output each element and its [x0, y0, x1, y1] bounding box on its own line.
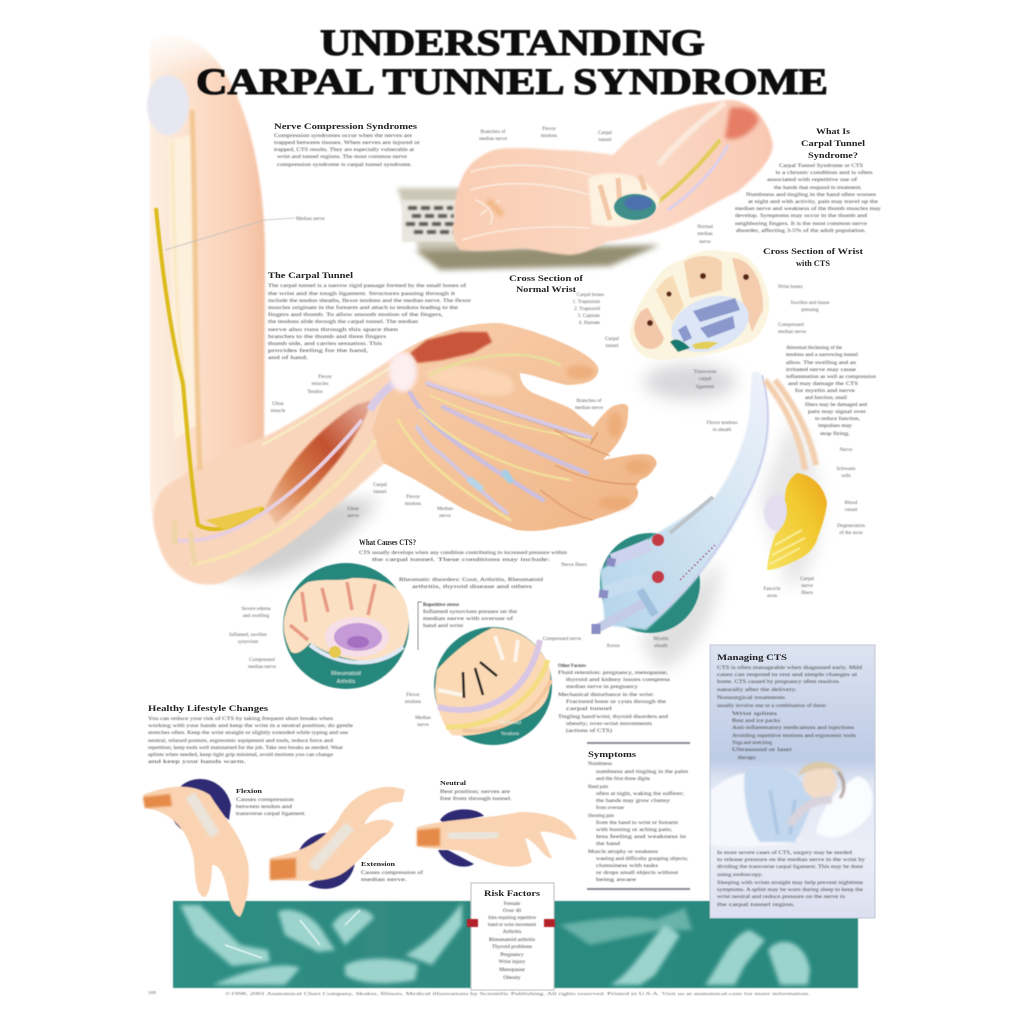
- anatomical labels: median: [697, 231, 713, 237]
- text: nerve compression syndromes: trapped between tissues. When nerves are injured or: [274, 140, 420, 146]
- text: cross section of normal wrist: Normal Wrist: [516, 285, 576, 294]
- text: flexion label: between tendon and: [236, 804, 292, 810]
- panel: managing CTS: [710, 645, 875, 918]
- anatomical labels: Fascicle: [764, 586, 781, 592]
- anatomical labels: in sheath: [713, 427, 732, 433]
- lobe C: [684, 256, 722, 298]
- anatomical labels: cells: [841, 473, 851, 479]
- text: healthy lifestyle changes: stretches often. Keep the wrist straight or slightly extended while typing and use: [148, 729, 349, 736]
- lobe B: [656, 276, 684, 322]
- anatomical labels: tendons: [541, 133, 557, 139]
- pale hands in band: [180, 903, 810, 985]
- text: CTS pathology description: irritated nerve may cause: [786, 367, 857, 373]
- text: what causes CTS: Rheumatic disorders: Gout, Arthritis, Rheumatoid: [399, 577, 543, 583]
- text: the carpal tunnel: The Carpal Tunnel: [268, 271, 354, 280]
- panel: managing CTS: Yoga and stretching: [732, 740, 772, 746]
- anatomical labels: Wrist bones: [778, 284, 803, 290]
- text: symptoms: from overuse: [596, 804, 624, 811]
- panel: risk factors: hand or wrist movement: [488, 922, 536, 928]
- panel: managing CTS: naturally after the delivery.: [717, 686, 798, 693]
- anatomical labels: Flexor: [406, 494, 420, 500]
- text: symptoms: Muscle atrophy or weakness: [588, 849, 658, 855]
- anatomical labels: Carpal: [800, 576, 814, 582]
- text: other factors list: Other Factors: [558, 663, 587, 669]
- panel: risk factors: Obesity: [503, 975, 521, 981]
- anatomical labels: nerve: [801, 583, 813, 589]
- anatomical labels: Blood: [845, 500, 858, 506]
- thumb muscle: [410, 332, 492, 363]
- anatomical labels: tendons: [405, 501, 421, 507]
- anatomical labels: Ulnar: [347, 506, 359, 512]
- text: what is carpal tunnel syndrome: develop. Symptoms may occur in the thumb and: [735, 213, 867, 219]
- arm muscle and nerve: [725, 107, 758, 139]
- text: nerve compression syndromes: compression syndrome is carpal tunnel syndrome.: [277, 162, 413, 168]
- text: what causes CTS: What Causes CTS?: [359, 538, 416, 547]
- anatomical labels: median nerve: [248, 664, 277, 670]
- anatomical labels: Schwann: [836, 466, 856, 472]
- text: CTS pathology description: for myelin and nerve: [795, 387, 856, 394]
- text: nerve compression syndromes: Nerve Compression Syndromes: [274, 122, 417, 131]
- lobe D: [732, 258, 763, 332]
- panel: managing CTS: using endoscopy.: [717, 872, 764, 878]
- anatomical labels: Severe edema: [242, 606, 271, 612]
- anatomical labels: Branches of: [577, 397, 602, 404]
- text: extension label: [361, 861, 423, 883]
- text: symptoms: numbness and tingling in the palm: [596, 769, 689, 775]
- text: symptoms: clumsiness with tasks: [596, 863, 658, 869]
- text: what is carpal tunnel syndrome: Carpal Tunnel Syndrome or CTS: [779, 163, 863, 169]
- anatomical labels: Flexor tendons: [707, 420, 737, 426]
- forearm tendons: [175, 365, 400, 565]
- anatomical labels: median nerve: [479, 136, 508, 142]
- text: what is carpal tunnel syndrome: with CTS: [796, 259, 831, 268]
- shoulder bone and upper arm strips: [147, 75, 200, 470]
- text: other factors list: (actions of CTS): [566, 727, 612, 734]
- text: healthy lifestyle changes: splints when needed, keep tight grip minimal, avoid motions you can change: [148, 752, 334, 758]
- circle: thickened tendons: [434, 627, 552, 745]
- circle: rheumatoid arthritis: Arthritis: [337, 679, 356, 685]
- circle: rheumatoid arthritis: [283, 563, 409, 689]
- text: healthy lifestyle changes: working with your hands and keep the wrist in a neutral position; do gentle: [148, 723, 354, 729]
- panel: managing CTS: Sleeping with wrists straight may help prevent nighttime: [717, 880, 864, 886]
- text: the carpal tunnel: branches to the thumb and three fingers: [268, 333, 386, 340]
- finger separators: [540, 430, 636, 520]
- anatomical labels: Flexor: [406, 692, 420, 698]
- panel: risk factors: Menopause: [499, 967, 525, 973]
- anatomical labels: Median: [415, 715, 431, 721]
- text: CTS pathology description: and may damage the CTS: [788, 381, 858, 387]
- text: what is carpal tunnel syndrome: Numbness and tingling in the hand often worsen: [746, 191, 876, 198]
- text: the carpal tunnel: provides feeling for the hand,: [268, 347, 369, 354]
- anatomical labels: Compressed: [249, 657, 275, 663]
- anatomical labels: Transverse: [694, 369, 717, 375]
- text: CTS pathology description: and function; small: [805, 394, 847, 401]
- hand and forearm: [453, 100, 773, 255]
- soft shadows: [760, 420, 820, 590]
- text: symptoms: Symptoms: [588, 750, 636, 759]
- red tabs: [467, 919, 478, 927]
- text: neutral label: Best position; nerves are: [440, 789, 511, 795]
- anatomical labels: Swollen and tissue: [791, 300, 830, 306]
- forearm: [153, 347, 425, 585]
- text: flexion label: Flexion: [236, 788, 262, 795]
- elbow tendon cluster: [205, 506, 262, 530]
- anatomical labels: muscle: [271, 408, 286, 414]
- text: nerve compression syndromes: Compression syndromes occur when the nerves are: [274, 133, 413, 139]
- anatomical labels: Carpal bones: [577, 292, 604, 298]
- text: cross section of normal wrist: Cross Section of: [509, 274, 583, 283]
- panel: managing CTS: Ultrasound or laser: [732, 747, 792, 753]
- text: symptoms: Shooting pain: [588, 813, 614, 819]
- text: the carpal tunnel: the tendons slide through the carpal tunnel. The median: [268, 319, 418, 325]
- text: nerve compression syndromes: [274, 122, 420, 168]
- anatomical labels: carpal: [699, 376, 712, 382]
- text: the carpal tunnel: the wrist and the tough ligament. Structures passing through it: [268, 291, 456, 297]
- anatomical labels: Flexor: [542, 126, 556, 132]
- forearm muscle: [265, 400, 372, 524]
- text: neutral label: [440, 780, 513, 802]
- text: other factors list: thyroid and kidney issues compress: [566, 677, 670, 683]
- yellow nerve bundle: [767, 473, 827, 570]
- thenar pad: [425, 366, 514, 396]
- text: cross section of normal wrist: [509, 274, 583, 294]
- cut nerve cylinders: [596, 497, 713, 634]
- anatomical labels: tunnel: [599, 137, 612, 143]
- anatomical labels: 2. Trapezoid: [574, 306, 600, 312]
- panel: managing CTS: cases can respond to rest and simple changes at: [717, 672, 858, 678]
- text: the carpal tunnel: fingers and thumb. To allow smooth motion of the fingers,: [268, 311, 444, 318]
- text: symptoms: and the first three digits: [596, 775, 650, 782]
- anatomical labels: and swelling: [243, 613, 270, 619]
- text: symptoms: the hands may grow clumsy: [596, 798, 670, 804]
- hand tendons: [398, 355, 593, 520]
- text: symptoms: or drops small objects without: [596, 870, 679, 876]
- text: nerve compression syndromes: wrist and tunnel regions. The most common nerve: [277, 154, 408, 160]
- circle: thickened tendons: Tendons: [501, 731, 520, 737]
- panel: risk factors: Risk Factors: [484, 889, 540, 898]
- text: CTS pathology description: [786, 344, 876, 437]
- text: symptoms: [587, 742, 690, 890]
- keyboard: [397, 188, 660, 270]
- panel: risk factors: [467, 883, 555, 990]
- text: the carpal tunnel: nerve also runs through this space then: [268, 327, 398, 333]
- anatomical labels: Axons: [606, 643, 620, 649]
- nerve ridges: [770, 530, 805, 564]
- anatomical labels: of the axon: [839, 529, 863, 536]
- text: symptoms: Hand pain: [588, 784, 608, 790]
- text: CTS pathology description: fibers may be damaged and: [805, 401, 867, 408]
- text: extension label: Extension: [361, 861, 395, 868]
- text: what is carpal tunnel syndrome: the hands that respond to treatment.: [774, 185, 863, 191]
- fingertip shading: [566, 365, 651, 510]
- anatomical labels: Ulnar: [272, 401, 284, 407]
- sleeping person: [711, 762, 873, 847]
- anatomical labels: Myelin: [654, 636, 669, 642]
- text: other factors list: obesity; over-wrist movements: [566, 721, 652, 727]
- panel: managing CTS: In more severe cases of CTS, surgery may be needed: [717, 849, 852, 856]
- lobe A: [634, 308, 664, 349]
- text: what is carpal tunnel syndrome: Syndrome?: [808, 151, 858, 160]
- text: symptoms: wasting and difficulty grasping objects;: [596, 855, 688, 862]
- text: what causes CTS: [359, 538, 567, 650]
- lilac edge of sheath: [650, 375, 768, 622]
- title: [196, 23, 828, 103]
- panel: managing CTS: CTS is often manageable when diagnosed early. Mild: [717, 664, 862, 671]
- nerve and tendon cutaway illustration: [596, 372, 827, 670]
- panel: managing CTS: Anti-inflammatory medications and injections: [732, 724, 854, 731]
- carpal bones: [588, 173, 660, 227]
- panel: risk factors: Female: [504, 901, 521, 907]
- circle: rheumatoid arthritis: Rheumatoid: [331, 671, 361, 677]
- top fade of shoulder: [140, 25, 260, 75]
- anatomical labels: pressing: [801, 307, 819, 313]
- text: CTS pathology description: impulses may: [818, 423, 852, 429]
- text: other factors list: Fractured bone or cysts through the: [566, 699, 667, 705]
- text: healthy lifestyle changes: Healthy Lifestyle Changes: [148, 704, 268, 713]
- icon: extension hand: [270, 787, 405, 889]
- text: what is carpal tunnel syndrome: neighboring fingers. It is the most common nerve: [735, 220, 868, 227]
- text: healthy lifestyle changes: neutral, relaxed posture, ergonomic equipment and tools, reduce force and: [148, 737, 333, 744]
- wrist highlight: [389, 352, 417, 392]
- text: CTS pathology description: to reduce function,: [815, 415, 861, 422]
- text: what is carpal tunnel syndrome: median nerve and weakness of the thumb muscles may: [735, 205, 881, 212]
- text: CTS pathology description: Abnormal thickening of the: [786, 344, 842, 351]
- text: the carpal tunnel: muscles originate in the forearm and attach to tendons leading to the: [268, 304, 459, 311]
- footer credit line: ©1998, 2001 Anatomical Chart Company, Skokie, Illinois. Medical illustrations by Scientific Publishing. All rights reserved. Printed in U.S.A. Visit us at anatomical.com for more information.: [225, 991, 810, 997]
- anatomical labels: Branches of: [481, 128, 506, 135]
- panel: risk factors: Thyroid problems: [492, 944, 532, 950]
- anatomical labels: nerve: [439, 513, 451, 519]
- anatomical labels: Normal: [697, 224, 713, 230]
- anatomical labels: Median nerve: [296, 216, 325, 222]
- text: symptoms: the hand: [596, 841, 620, 847]
- anatomical labels: tunnel: [374, 489, 387, 495]
- text: other factors list: [558, 663, 670, 734]
- text: symptoms: less feeling and weakness in: [596, 833, 686, 840]
- text: CTS pathology description: inflammation as well as compression: [786, 373, 876, 380]
- text: the carpal tunnel: thumb side, and carries sensation. This: [268, 341, 382, 347]
- anatomical labels: 1. Trapezium: [573, 299, 600, 305]
- main arm and hand illustration: [140, 25, 657, 585]
- nerve root strands: [765, 380, 816, 470]
- text: what causes CTS: the carpal tunnel. These conditions may include:: [372, 557, 551, 563]
- panel: managing CTS: Avoiding repetitive motions and ergonomic tools: [732, 733, 856, 739]
- panel: risk factors: Jobs requiring repetitive: [488, 915, 536, 921]
- panel: risk factors: Arthritis: [503, 929, 521, 935]
- text: what is carpal tunnel syndrome: [735, 127, 881, 268]
- text: what causes CTS: Inflamed synovium presses on the: [423, 608, 518, 615]
- panel: managing CTS: dividing the transverse carpal ligament. This may be done: [717, 864, 864, 870]
- panel: managing CTS: to release pressure on the median nerve in the wrist by: [717, 857, 865, 863]
- text: nerve compression syndromes: trapped, CTS results. They are especially vulnerable at: [274, 147, 415, 153]
- anatomical labels: Nerve: [840, 447, 853, 453]
- anatomical labels: 4. Hamate: [579, 320, 601, 326]
- footer credit line: 1008: [148, 990, 156, 995]
- pale fascicle: [764, 495, 792, 531]
- anatomical labels: 3. Capitate: [578, 313, 601, 319]
- anatomical labels: Nerve fibers: [561, 561, 587, 568]
- text: what is carpal tunnel syndrome: disorder, affecting 3-5% of the adult population.: [736, 227, 867, 234]
- text: CTS pathology description: stop firing.: [820, 430, 851, 437]
- anatomical labels: Carpal: [373, 482, 387, 488]
- text: neutral label: free from through tunnel.: [440, 795, 513, 802]
- panel: managing CTS: wrist neutral and reduce pressure on the nerve in: [717, 894, 845, 900]
- anatomical labels: nerve: [417, 722, 429, 728]
- panel: managing CTS: usually involve one or a combination of these:: [717, 702, 827, 709]
- anatomical labels: nerve: [347, 513, 359, 519]
- text: what is carpal tunnel syndrome: Cross Section of Wrist: [763, 247, 863, 256]
- anatomical labels: sheath: [654, 643, 668, 649]
- text: the carpal tunnel: The carpal tunnel is a narrow rigid passage formed by the small bones of: [268, 282, 466, 289]
- median nerve: [156, 208, 264, 529]
- anatomical labels: Compressed nerve: [543, 636, 582, 642]
- text: what causes CTS: median nerve with overuse of: [423, 615, 513, 622]
- anatomical labels: fibers: [801, 589, 813, 596]
- text: the carpal tunnel: and of hand.: [268, 354, 309, 361]
- teal photo band: [173, 901, 858, 988]
- panel: managing CTS: therapy: [738, 755, 756, 761]
- text: extension label: Causes compression of: [361, 869, 423, 876]
- text: flexion label: transverse carpal ligament.: [236, 811, 307, 817]
- panel: managing CTS: home. CTS caused by pregnancy often resolves: [717, 678, 839, 685]
- panel: risk factors: Wrist injury: [499, 959, 526, 965]
- anatomical labels: Inflamed, swollen: [229, 631, 267, 638]
- text: neutral label: Neutral: [440, 780, 466, 787]
- text: what is carpal tunnel syndrome: associated with repetitive use of: [767, 176, 857, 183]
- hand: [372, 323, 657, 531]
- anatomical labels: ligament: [696, 384, 715, 390]
- text: what causes CTS: CTS usually develops when any condition contributing to increased pressure within: [359, 550, 567, 556]
- anatomical labels: Tendon: [307, 389, 323, 395]
- text: healthy lifestyle changes: You can reduce your risk of CTS by taking frequent short breaks when: [148, 715, 333, 722]
- text: symptoms: often at night, waking the sufferer;: [596, 790, 684, 797]
- anatomical labels: Degeneration: [837, 523, 865, 529]
- cross section of wrist with CTS: [630, 250, 769, 400]
- text: CTS pathology description: pain may signal over: [808, 409, 866, 415]
- text: other factors list: Tingling hand/wrist; thyroid disorders and: [558, 714, 668, 720]
- anatomical labels: [165, 126, 865, 728]
- text: CTS pathology description: allow. The swelling and an: [786, 360, 856, 366]
- icon: flexion hand: [143, 779, 249, 917]
- anatomical labels: Carpal: [598, 130, 612, 136]
- anatomical labels: synovium: [238, 639, 258, 645]
- anatomical labels: median nerve: [575, 405, 604, 411]
- text: extension label: median nerve.: [361, 877, 408, 883]
- anatomical labels: axon: [767, 593, 777, 599]
- text: other factors list: carpal tunnel: [566, 706, 613, 712]
- text: flexion label: [236, 788, 307, 817]
- text: symptoms: being aware: [596, 877, 637, 883]
- anatomical labels: Carpal: [605, 336, 619, 342]
- text: what causes CTS: arthritis, thyroid disease and others: [412, 584, 532, 590]
- nerve shadow: [640, 560, 720, 670]
- anatomical labels: tendons: [405, 699, 421, 705]
- anatomical labels: muscles: [312, 381, 328, 387]
- text: other factors list: Mechanical disturbance in the wrist:: [558, 692, 655, 698]
- icon: neutral hand: [417, 809, 577, 867]
- circle: thickened tendons: Thickened: [499, 720, 521, 726]
- panel: managing CTS: Rest and ice packs: [732, 718, 780, 724]
- title: UNDERSTANDING: [320, 23, 705, 64]
- text: other factors list: Fluid retention: pregnancy, menopause,: [558, 670, 669, 676]
- panel: managing CTS: the carpal tunnel region.: [717, 902, 796, 908]
- anatomical labels: tunnel: [606, 343, 619, 349]
- text: what causes CTS: Repetitive stress: [423, 602, 460, 608]
- text: what is carpal tunnel syndrome: is a chronic condition and is often: [776, 169, 873, 176]
- panel: risk factors: Over 40: [503, 908, 521, 914]
- text: CTS pathology description: tendons and a narrowing tunnel: [786, 352, 858, 358]
- anatomical labels: nerve: [699, 239, 711, 245]
- title: CARPAL TUNNEL SYNDROME: [196, 62, 828, 103]
- panel: risk factors: Rheumatoid arthritis: [489, 937, 535, 943]
- white nerve sheath swoosh: [600, 372, 769, 630]
- anatomical labels: Compressed: [778, 322, 804, 328]
- text: the carpal tunnel: [268, 271, 471, 361]
- text: what is carpal tunnel syndrome: What Is: [816, 127, 850, 136]
- teal circle: [600, 533, 700, 633]
- anatomical labels: Median: [437, 506, 453, 512]
- footer credit line: [148, 990, 810, 997]
- upper arm: [150, 36, 265, 560]
- small hands: flexion, extension, neutral: [143, 779, 577, 917]
- shadow: [644, 364, 736, 400]
- text: flexion label: Causes compression: [236, 797, 294, 803]
- text: symptoms: with burning or aching pain;: [596, 827, 673, 833]
- text: healthy lifestyle changes: and keep your hands warm.: [148, 759, 247, 765]
- text: what is carpal tunnel syndrome: Carpal Tunnel: [801, 139, 866, 148]
- text: the carpal tunnel: include the tendon sheaths, flexor tendons and the median nerve. The flexor: [268, 297, 471, 304]
- panel: managing CTS: Managing CTS: [717, 653, 788, 662]
- top hand on keyboard illustration: [397, 100, 773, 270]
- panel: managing CTS: Wrist splints: [732, 711, 777, 717]
- text: healthy lifestyle changes: [148, 704, 354, 765]
- text: healthy lifestyle changes: repetition; keep tools well maintained for the job. Take rest breaks as needed. Wear: [148, 744, 343, 751]
- finger outlines: [462, 165, 600, 240]
- text: symptoms: Numbness: [588, 761, 612, 767]
- anatomical labels: Flexor: [318, 374, 332, 380]
- text: what causes CTS: hand and wrist: [423, 623, 464, 629]
- anatomical labels: vessel: [845, 507, 858, 513]
- panel: managing CTS: Nonsurgical treatments: [717, 695, 785, 701]
- red tab right: [544, 919, 555, 927]
- panel: risk factors: Pregnancy: [500, 952, 524, 958]
- anatomical labels: median nerve: [778, 329, 807, 335]
- text: other factors list: median nerve in pregnancy: [566, 684, 638, 690]
- text: symptoms: from the hand to wrist or forearm: [596, 819, 679, 826]
- text: what is carpal tunnel syndrome: at night and with activity, pain may travel up the: [748, 199, 879, 205]
- panel: managing CTS: symptoms. A splint may be worn during sleep to keep the: [717, 887, 864, 893]
